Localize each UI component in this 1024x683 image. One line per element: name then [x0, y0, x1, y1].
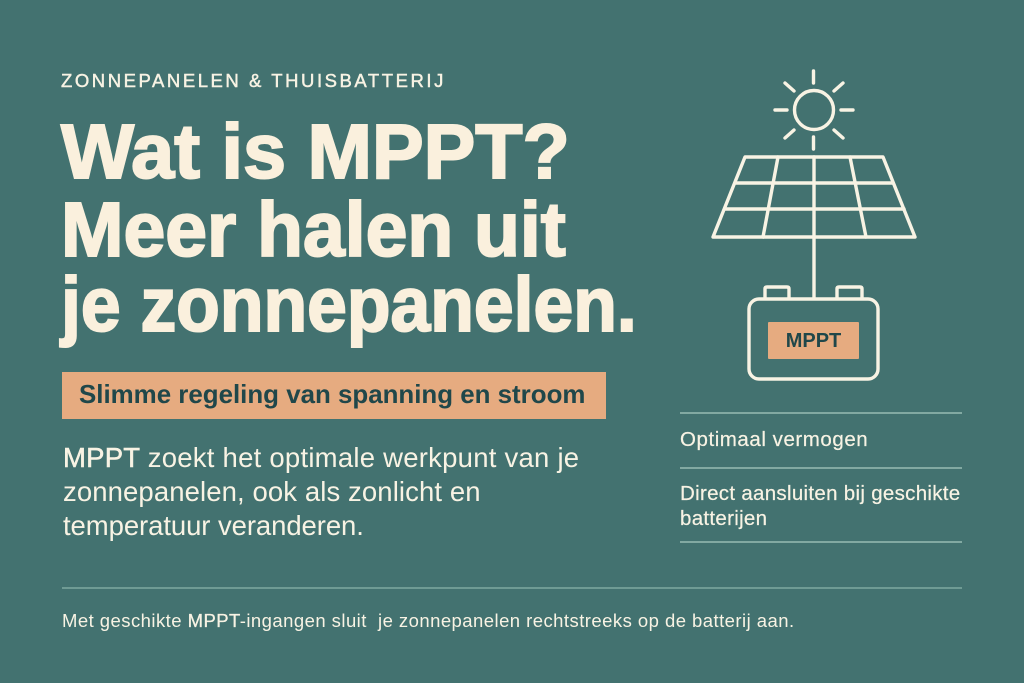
- icon: battery: [749, 287, 878, 379]
- MPPT label: MPPT: [786, 330, 841, 352]
- footer note: Met geschikte MPPT-ingangen sluit je zonnepanelen rechtstreeks op de batterij aan.: [62, 610, 795, 631]
- icon: sun: [775, 71, 853, 149]
- icon: solar panel: [713, 157, 915, 237]
- icon: sun, solar panel and battery: [711, 69, 917, 381]
- intro paragraph: MPPT zoekt het optimale werkpunt van je: [63, 442, 579, 473]
- main title: Wat is MPPT?: [61, 109, 570, 195]
- main title: [58, 109, 637, 348]
- main title: je zonnepanelen.: [61, 262, 637, 348]
- benefits list: [680, 412, 962, 543]
- eyebrow heading: ZONNEPANELEN & THUISBATTERIJ: [61, 70, 446, 91]
- main title: Meer halen uit: [61, 187, 566, 273]
- benefit: direct connection: [680, 482, 960, 530]
- intro paragraph: temperatuur veranderen.: [63, 510, 364, 541]
- benefit: direct connection: Direct aansluiten bij geschikte: [680, 482, 960, 505]
- intro paragraph: [63, 442, 579, 541]
- highlighted subtitle: Slimme regeling van spanning en stroom: [79, 381, 585, 409]
- intro paragraph: zonnepanelen, ook als zonlicht en: [63, 476, 481, 507]
- connection wire: [812, 237, 816, 298]
- benefit: direct connection: batterijen: [680, 507, 767, 530]
- highlighted subtitle: [62, 372, 606, 419]
- benefit: optimal power: Optimaal vermogen: [680, 428, 868, 451]
